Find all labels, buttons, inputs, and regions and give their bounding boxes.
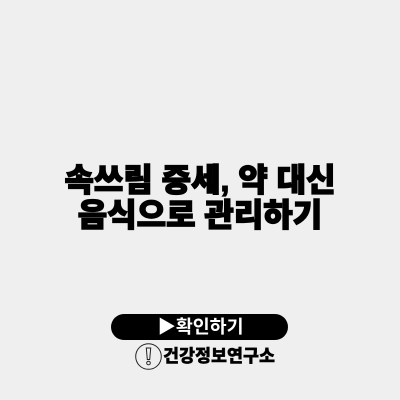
title: 음식으로 관리하기 xyxy=(78,197,322,233)
button: confirm xyxy=(111,314,288,340)
icon: exclamation circle xyxy=(135,343,162,370)
title xyxy=(64,162,336,233)
brand name: 건강정보연구소 xyxy=(163,346,275,366)
brand logo xyxy=(135,343,275,370)
title: 속쓰림 증세, 약 대신 xyxy=(64,162,336,198)
button label: ▶확인하기 xyxy=(157,316,244,337)
